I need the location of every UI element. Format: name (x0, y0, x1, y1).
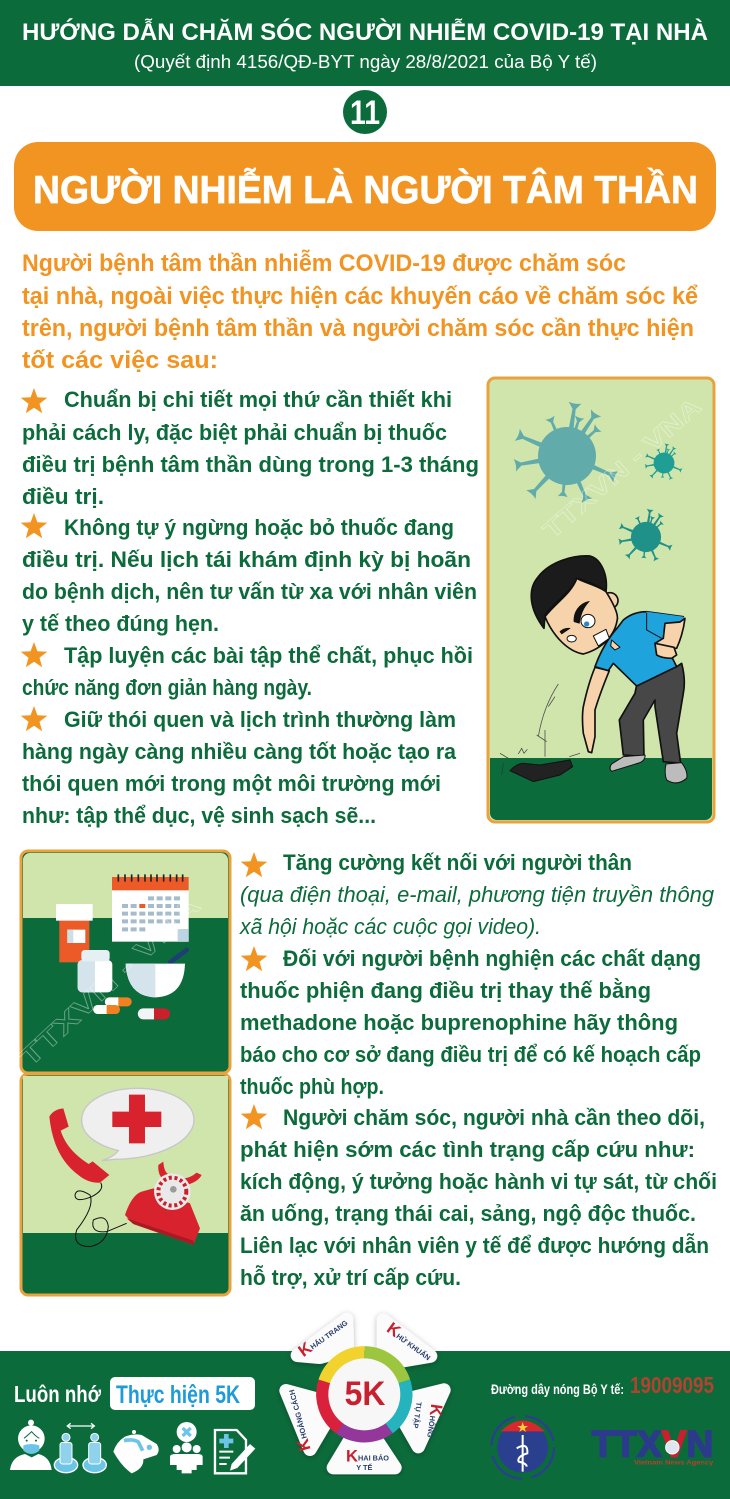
bullet: opioid treatment: báo cho cơ sở đang điều trị để có kế hoạch cấp (240, 1042, 701, 1067)
petal: Không tụ tập: HÔNG (425, 1415, 437, 1438)
bullet: prepare: điều trị bệnh tâm thần dùng trong 1-3 tháng (22, 452, 479, 477)
footer slogan (14, 1377, 255, 1410)
intro paragraph: tốt các việc sau: (22, 347, 218, 374)
logo: TTXVN: Vietnam News Agency (634, 1459, 714, 1466)
icon: capsules (93, 997, 170, 1019)
intro paragraph: tại nhà, ngoài việc thực hiện các khuyến cáo về chăm sóc kể (22, 283, 698, 310)
icon: red telephone (49, 1108, 202, 1247)
bullet: opioid treatment: Đối với người bệnh nghiện các chất dạng (283, 946, 701, 971)
intro paragraph: trên, người bệnh tâm thần và người chăm sóc cần thực hiện (22, 315, 694, 342)
petal: Khử khuẩn (383, 1319, 436, 1364)
bullet: caregiver monitoring: phát hiện sớm các tình trạng cấp cứu như: (240, 1137, 695, 1162)
petal: Không tụ tập (405, 1390, 446, 1447)
petal: Khai báo y tế: K (346, 1446, 358, 1465)
header title: HƯỚNG DẪN CHĂM SÓC NGƯỜI NHIỄM COVID-19 TẠI NHÀ (22, 17, 708, 46)
bullet: prepare (21, 387, 479, 509)
icon: medium virus (618, 509, 673, 562)
bullet: caregiver monitoring (240, 1104, 717, 1290)
illustration: man throwing wallet (531, 556, 687, 783)
icon: person with mask (10, 1420, 52, 1470)
bullet: opioid treatment: methadone hoặc buprenophine hãy thông (240, 1010, 678, 1035)
petal: Khẩu trang: K (295, 1338, 315, 1361)
petal: Khẩu trang: HẨU TRANG (309, 1318, 350, 1351)
bullet: stay connected: (qua điện thoại, e-mail, phương tiện truyền thông (240, 882, 715, 907)
petal: Khai báo y tế: Y TẾ (356, 1462, 373, 1472)
watermark: TTXVN - VNA (538, 393, 707, 545)
bullet: caregiver monitoring: ăn uống, trạng thái cai, sảng, ngộ độc thuốc. (240, 1201, 696, 1226)
hotline: 19009095 (630, 1372, 714, 1398)
intro paragraph: Người bệnh tâm thần nhiễm COVID-19 được chăm sóc (22, 249, 626, 277)
intro paragraph (22, 249, 698, 374)
center label 5K: 5K (345, 1375, 385, 1413)
petal: Khử khuẩn: K (383, 1319, 404, 1341)
panel: man with viruses (488, 378, 714, 822)
bullet: caregiver monitoring: hỗ trợ, xử trí cấp cứu. (240, 1265, 461, 1290)
diagram: 5K wheel (280, 1312, 446, 1472)
bullet: caregiver monitoring: kích động, ý tưởng hoặc hành vi tự sát, từ chối (240, 1169, 717, 1194)
bullet: stay connected: Tăng cường kết nối với người thân (283, 850, 632, 875)
bullet: caregiver monitoring: Liên lạc với nhân viên y tế để được hướng dẫn (240, 1233, 709, 1258)
petal: Không tụ tập: K (426, 1403, 446, 1417)
icon: health declaration (215, 1430, 255, 1473)
bullet: do not stop medication (21, 513, 477, 636)
icon: thrown wallet (500, 684, 580, 782)
icon: distancing people (54, 1423, 106, 1473)
orange title banner: NGƯỜI NHIỄM LÀ NGƯỜI TÂM THẦN (33, 168, 698, 212)
center label 5K (328, 1358, 400, 1430)
bullet: exercise: chức năng đơn giản hàng ngày. (22, 675, 312, 700)
petal: Khai báo y tế (333, 1440, 395, 1472)
ring (322, 1352, 406, 1436)
bullet: prepare: Chuẩn bị chi tiết mọi thứ cần thiết khi (64, 387, 452, 412)
bullet: opioid treatment: thuốc phù hợp. (240, 1074, 384, 1099)
panel: emergency phone (21, 1074, 230, 1295)
footer slogan: Luôn nhớ (14, 1381, 102, 1407)
bullet: stay connected: xã hội hoặc các cuộc gọi video). (239, 914, 541, 939)
petal: Khẩu trang (295, 1312, 351, 1361)
bullet: do not stop medication: do bệnh dịch, nên tư vấn từ xa với nhân viên (22, 579, 477, 604)
orange title banner (14, 142, 716, 231)
watermark: TTXVN - VNA (14, 890, 206, 1072)
hotline (491, 1372, 714, 1398)
icon: speech bubble with red cross (82, 1088, 194, 1161)
bullet: prepare: phải cách ly, đặc biệt phải chuẩn bị thuốc (22, 420, 447, 445)
icon: small virus (645, 443, 682, 480)
hotline: Đường dây nóng Bộ Y tế: (491, 1381, 624, 1397)
header band (0, 0, 730, 86)
bullet: routines: thói quen mới trong một môi trường mới (22, 771, 441, 796)
petal: Khoảng cách (280, 1388, 325, 1453)
bullet: exercise (21, 642, 473, 700)
header subtitle: (Quyết định 4156/QĐ-BYT ngày 28/8/2021 của Bộ Y tế) (134, 52, 597, 72)
bullet: opioid treatment: thuốc phiện đang điều trị thay thế bằng (240, 978, 651, 1003)
icons: 5K actions (10, 1420, 255, 1473)
number badge: 11 (350, 94, 380, 132)
bullet: stay connected (239, 850, 715, 939)
petal: Khoảng cách: HOẢNG CÁCH (287, 1389, 309, 1440)
bullet: prepare: điều trị. (22, 484, 104, 509)
petal: Khoảng cách: K (293, 1437, 315, 1453)
icon: calendar (112, 874, 189, 942)
petal: Khai báo y tế: HAI BÁO (358, 1454, 389, 1463)
bullet: routines: hàng ngày càng nhiều càng tốt hoặc tạo ra (22, 739, 457, 764)
bullet: exercise: Tập luyện các bài tập thể chất, phục hồi (64, 643, 473, 668)
bullet: opioid treatment (240, 946, 701, 1099)
bullet: routines: Giữ thói quen và lịch trình thường làm (64, 707, 456, 732)
panel: medication and calendar (14, 851, 230, 1073)
logo: Ministry of Health (491, 1416, 554, 1479)
petal: Không tụ tập: TỤ TẬP (411, 1401, 424, 1429)
icon: white bottle (78, 950, 112, 992)
icon: orange pill bottle (56, 904, 93, 962)
petal: Khử khuẩn: HỬ KHUẨN (395, 1332, 432, 1362)
icon: washing hands (113, 1430, 159, 1473)
footer slogan: Thực hiện 5K (116, 1381, 240, 1409)
bullet: routines: như: tập thể dục, vệ sinh sạch sẽ... (22, 803, 376, 828)
bullet: do not stop medication: y tế theo đúng hẹn. (22, 611, 219, 636)
icon: large virus (514, 402, 618, 503)
bullet: routines (21, 706, 457, 828)
bullet: do not stop medication: Không tự ý ngừng hoặc bỏ thuốc đang (64, 515, 454, 540)
logo: TTXVN: TTXVN (592, 1423, 713, 1465)
icon: mortar and pestle (126, 950, 187, 997)
footer band (0, 1351, 730, 1499)
icon: no crowds (170, 1422, 203, 1473)
bullet: do not stop medication: điều trị. Nếu lịch tái khám định kỳ bị hoãn (22, 547, 471, 572)
bullet: caregiver monitoring: Người chăm sóc, người nhà cần theo dõi, (283, 1105, 705, 1130)
